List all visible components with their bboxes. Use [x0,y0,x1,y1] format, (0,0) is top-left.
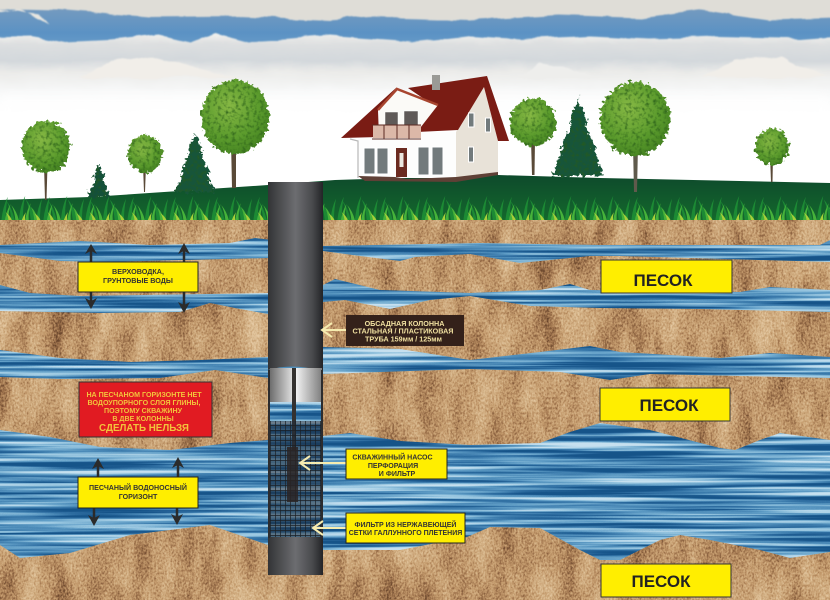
arrows [91,249,184,309]
warning box: ПОЭТОМУ СКВАЖИНУ [104,407,183,415]
main roof [408,76,509,141]
background trees [22,80,789,200]
label: pump [300,449,447,479]
sand label 2: ПЕСОК [639,396,699,415]
arrows [94,463,178,521]
label: perched water: ГРУНТОВЫЕ ВОДЫ [103,276,173,285]
label: filter: ФИЛЬТР ИЗ НЕРЖАВЕЮЩЕЙ [355,520,456,529]
sand label 2 [600,388,730,421]
underground strata [0,220,830,600]
label: filter [313,513,465,543]
warning box: ВОДОУПОРНОГО СЛОЯ ГЛИНЫ, [88,399,201,407]
well casing pipe [268,182,323,575]
lower casing [268,537,323,575]
label: casing: СТАЛЬНАЯ / ПЛАСТИКОВАЯ [353,326,453,336]
tree 6 [755,128,789,182]
label: perched water [78,243,198,313]
silver inner left [270,368,292,403]
pine 2 [175,134,215,192]
label: casing: ТРУБА 159мм / 125мм [365,334,442,344]
dormer gable [379,91,438,136]
label: sandy aquifer [78,457,198,526]
grass foreground [0,196,830,221]
label: sandy aquifer: ГОРИЗОНТ [119,493,158,501]
dormer roof edge [378,89,438,110]
filter mesh [270,421,322,538]
door [396,148,407,177]
arrow [300,456,346,470]
water layers [0,236,830,562]
label: casing: ОБСАДНАЯ КОЛОННА [365,319,444,328]
tree 3 [201,80,269,188]
chimney [432,75,440,90]
windows [364,113,490,175]
riser tube [292,368,296,450]
label: pump: И ФИЛЬТР [379,471,416,478]
warning box: СДЕЛАТЬ НЕЛЬЗЯ [99,423,189,434]
label: pump: СКВАЖИННЫЙ НАСОС [352,452,433,462]
base plinth [358,172,498,182]
label: casing [322,315,464,346]
sand label 1: ПЕСОК [633,271,693,290]
sand label 3: ПЕСОК [631,572,691,591]
upper windows [385,111,418,126]
label: sandy aquifer: ПЕСЧАНЫЙ ВОДОНОСНЫЙ [89,483,187,492]
pump [287,447,298,502]
pine 1 [88,164,110,197]
sand [0,220,830,600]
balcony [372,125,421,139]
tree 5 [600,82,670,192]
sky with clouds [0,0,830,200]
warning box: В ДВЕ КОЛОННЫ [112,415,174,423]
warning box [79,382,212,437]
warning box: НА ПЕСЧАНОМ ГОРИЗОНТЕ НЕТ [86,391,202,399]
side wall [456,87,498,178]
label: filter: СЕТКИ ГАЛЛУННОГО ПЛЕТЕНИЯ [349,530,462,537]
pine 3 [552,98,604,176]
green hill [0,175,830,222]
label: pump: ПЕРФОРАЦИЯ [368,463,418,470]
left roof [341,87,397,138]
downpipe [350,139,358,178]
tree 1 [22,121,70,200]
arrow [313,521,346,535]
arrow [322,323,346,337]
sand label 3 [601,564,731,597]
tree 2 [128,135,162,192]
silver inner right [296,368,322,403]
upper casing [268,182,323,372]
front wall [358,132,456,178]
tree 4 [510,98,556,175]
water in well [270,402,322,538]
sand label 1 [601,260,732,293]
label: perched water: ВЕРХОВОДКА, [112,267,164,276]
house [341,75,509,182]
